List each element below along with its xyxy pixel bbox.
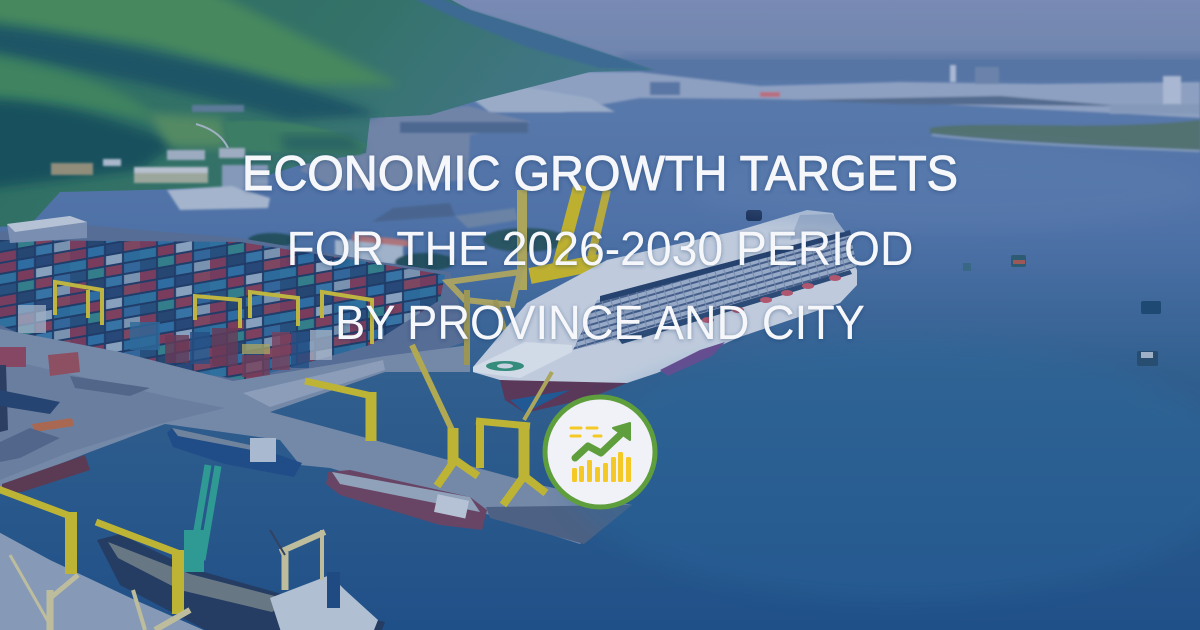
icon: green rising arrow	[575, 423, 630, 458]
lower left quay	[0, 530, 215, 630]
foreground container blocks	[18, 305, 332, 377]
badge circle	[545, 397, 655, 507]
hillside buildings	[51, 105, 268, 189]
sky	[0, 0, 1200, 70]
title line 1: ECONOMIC GROWTH TARGETS	[242, 147, 958, 201]
trees and building behind containers	[248, 228, 567, 271]
soft water light	[560, 150, 1200, 600]
pale deck cranes	[10, 530, 325, 630]
title line 3: BY PROVINCE AND CITY	[335, 297, 865, 350]
container stacks	[0, 240, 445, 380]
title line 2: FOR THE 2026-2030 PERIOD	[286, 223, 914, 276]
distant haze band	[620, 56, 1200, 82]
cruise ship	[473, 210, 857, 413]
far city shoreline	[470, 65, 1200, 118]
yellow ship-to-shore cranes behind ship	[448, 185, 607, 365]
icon: yellow dashes	[571, 428, 601, 436]
harbour office	[7, 216, 87, 243]
yellow jib cranes	[0, 345, 552, 614]
quay edge	[243, 360, 385, 407]
moored white boats	[167, 186, 518, 228]
gantry cranes in yard	[55, 282, 372, 344]
shore settlement and land behind hill	[300, 86, 615, 190]
teal deck crane	[184, 465, 218, 572]
title block	[242, 147, 958, 350]
distant boats on bay	[963, 255, 1161, 366]
quay roads and piers	[0, 328, 632, 544]
island	[930, 120, 1200, 151]
yard clutter and trucks	[0, 347, 150, 462]
container yard land	[0, 224, 470, 405]
moored cargo ships	[2, 428, 487, 530]
icon: yellow bars	[572, 452, 631, 482]
icon: growth chart badge	[545, 397, 655, 507]
green hills	[0, 0, 655, 228]
large bulk carrier	[97, 534, 385, 630]
